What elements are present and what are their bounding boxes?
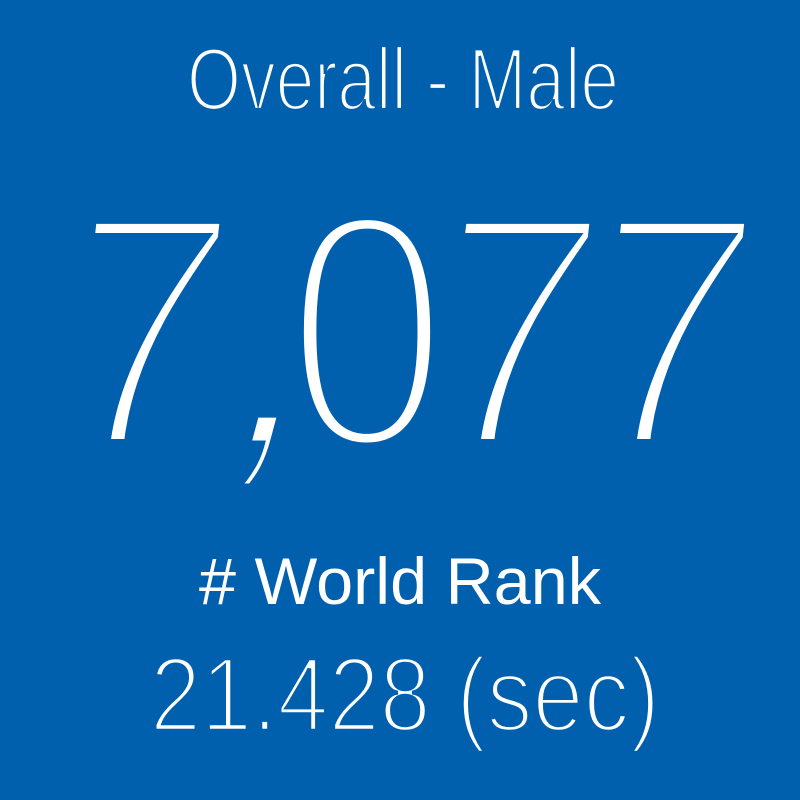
metric value: 21.428 (sec) (150, 636, 660, 754)
main number: 7 (41, 143, 251, 518)
main number: 7 (567, 143, 775, 518)
title: Overall - Male (187, 30, 619, 128)
metric label: # World Rank (199, 544, 602, 618)
main number: 7 (411, 143, 621, 518)
main number: , (196, 143, 385, 518)
main number (41, 143, 775, 518)
main number: 0 (286, 143, 448, 518)
